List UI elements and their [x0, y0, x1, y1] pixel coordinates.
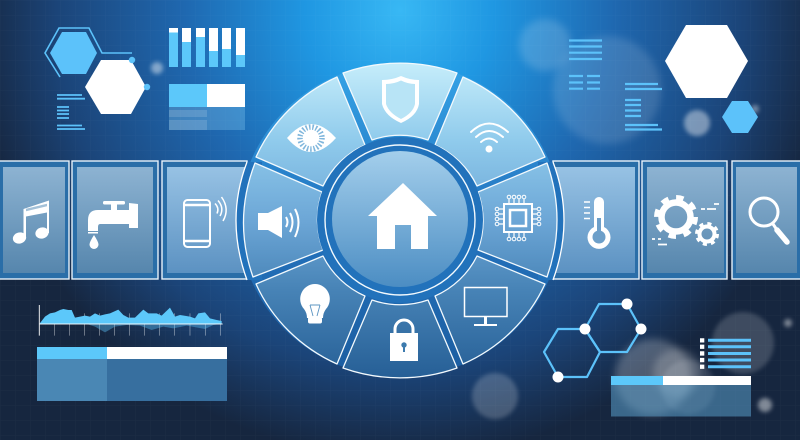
- panel: water tap: [72, 161, 158, 279]
- segment: monitor: [435, 256, 545, 364]
- stacked block bottom right: [611, 376, 751, 416]
- panel: settings gears: [642, 161, 727, 279]
- segment: wifi: [435, 77, 545, 186]
- bokeh lights: [151, 19, 792, 419]
- radial smart home hub: [236, 63, 564, 378]
- icon: speaker: [258, 206, 298, 238]
- icon: gears: [652, 198, 719, 244]
- segment: bulb: [256, 256, 365, 364]
- waveform chart: [39, 305, 223, 336]
- icon: faucet: [88, 201, 138, 249]
- panel: thermometer: [553, 161, 639, 279]
- outer side arcs: [236, 162, 564, 280]
- hexagons top right: [665, 25, 758, 133]
- hexagon cluster top left: [45, 28, 150, 129]
- stacked block top left: [169, 84, 245, 130]
- center dial: [317, 137, 483, 303]
- panel row left: [0, 161, 247, 279]
- text lines top right: [569, 40, 662, 130]
- icon: light bulb: [300, 284, 330, 324]
- hexagon network bottom right: [544, 298, 646, 382]
- icon: monitor: [464, 288, 507, 325]
- segment: lock: [343, 300, 457, 378]
- icon: chip: [495, 195, 541, 241]
- bar chart top left: [169, 28, 245, 67]
- icon: padlock: [390, 320, 418, 361]
- icon: music notes: [12, 200, 50, 245]
- segment: shield: [343, 63, 457, 140]
- icon: magnifier: [750, 198, 787, 242]
- panel: music: [0, 161, 69, 279]
- icon: eye: [287, 124, 336, 152]
- bullet list bottom right: [700, 338, 751, 369]
- icon: smartphone with waves: [184, 197, 226, 247]
- icon: house: [368, 183, 437, 249]
- panel row right: [553, 161, 800, 279]
- panel: phone: [162, 161, 247, 279]
- segment: eye: [256, 77, 365, 186]
- segment: chip: [478, 163, 557, 277]
- icon: thermometer: [584, 197, 611, 249]
- stacked block bottom left: [37, 347, 227, 401]
- segments: [243, 63, 557, 378]
- panel: search: [732, 161, 800, 279]
- icon: shield: [382, 76, 419, 123]
- icon: wifi: [471, 124, 508, 152]
- segment: speaker: [243, 163, 323, 277]
